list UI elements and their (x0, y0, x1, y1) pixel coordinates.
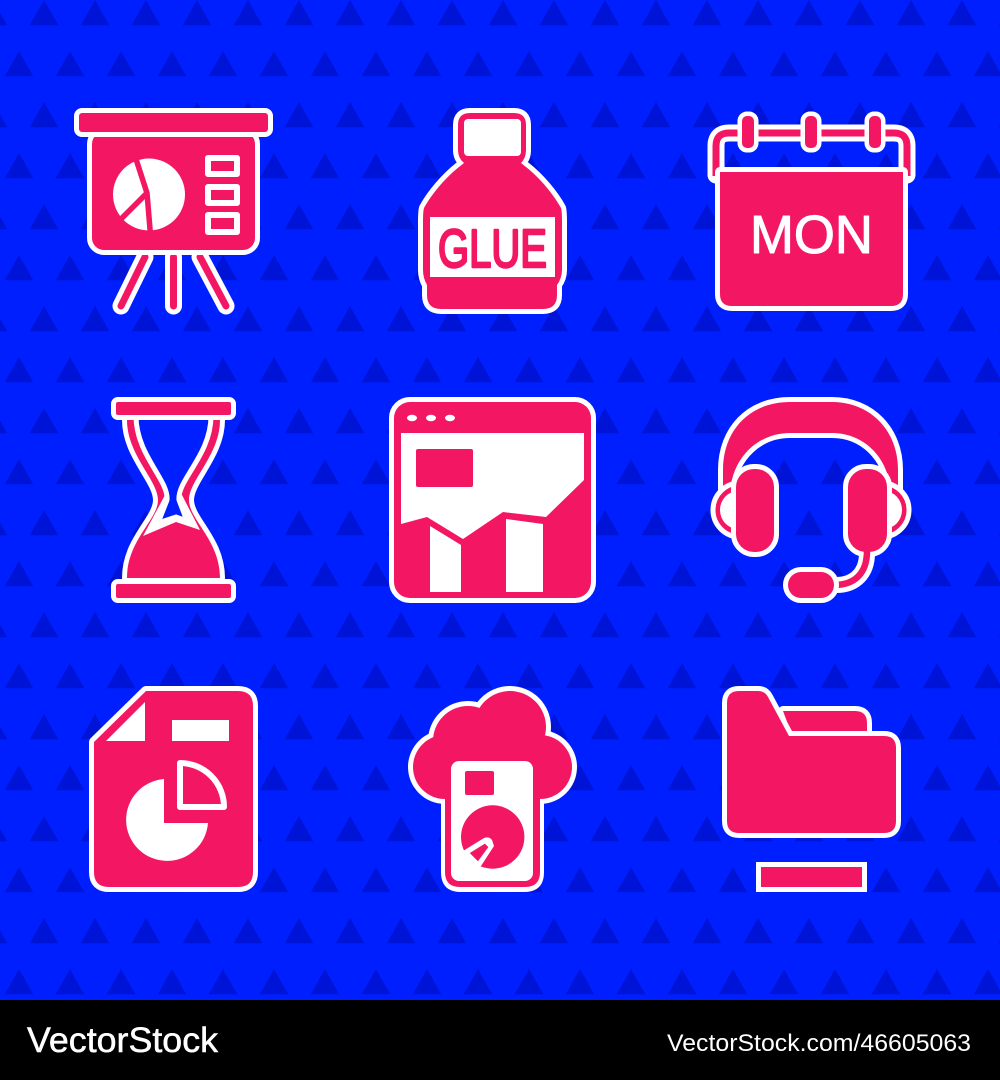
icon: presentation board with pie chart (79, 113, 268, 306)
footer brand name: VectorStock (27, 1021, 219, 1060)
icon: folder with bar (727, 691, 896, 887)
icon: calendar showing Monday (716, 116, 907, 306)
footer bar (0, 1000, 1000, 1080)
calendar day text: MON (750, 205, 873, 265)
glue label text: GLUE (438, 219, 547, 279)
icon: hourglass (116, 402, 231, 598)
icon: glue bottle (423, 113, 562, 309)
icon: browser window with chart (394, 402, 591, 598)
icon: cloud with hard drive (408, 686, 577, 892)
icon: headset with microphone (713, 402, 909, 598)
icon: document with pie chart (94, 691, 253, 887)
footer image url: VectorStock.com/46605063 (667, 1030, 971, 1057)
